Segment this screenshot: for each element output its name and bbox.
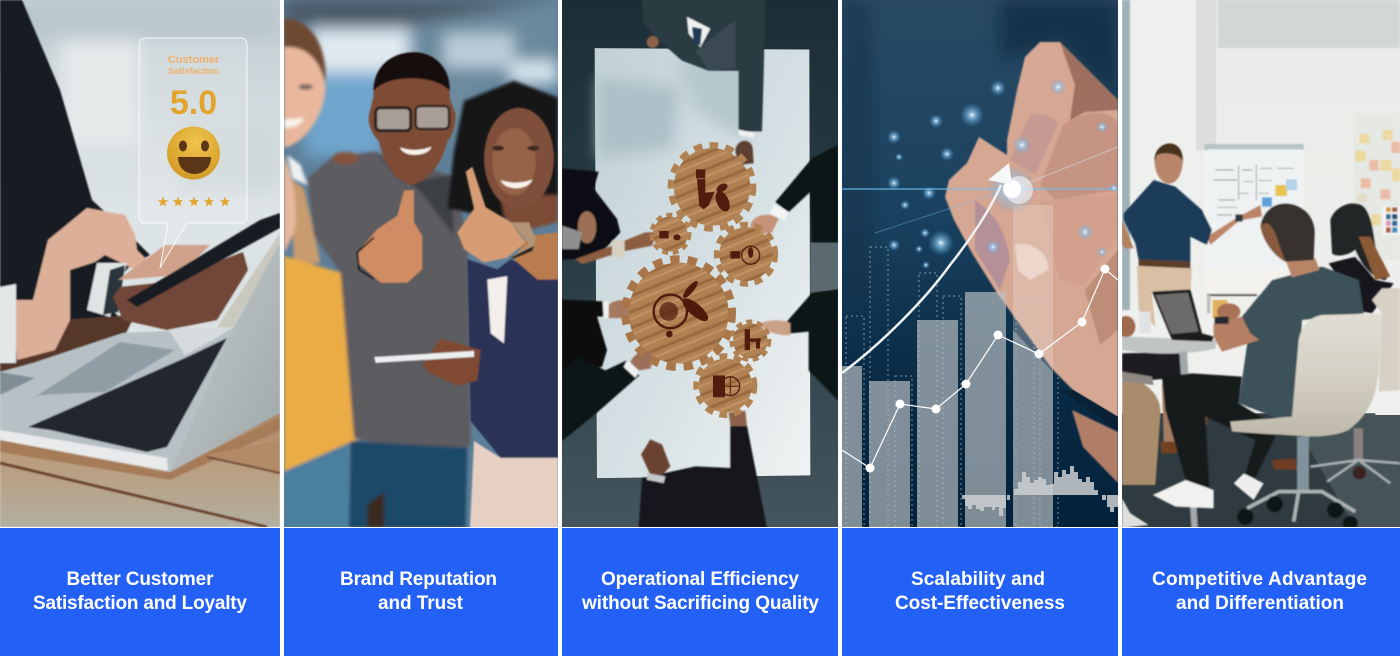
person left middle	[562, 300, 607, 370]
dark seat behind table	[1122, 352, 1185, 380]
man thumb hand	[357, 190, 422, 283]
right woman blouse	[467, 259, 558, 458]
icon: globe with leaves	[654, 279, 711, 337]
person right top	[775, 145, 838, 242]
panel: operational efficiency	[562, 0, 838, 656]
photo: team assembling wooden gears	[562, 0, 838, 528]
photo: presenter at whiteboard in office	[1117, 0, 1400, 531]
panel: scalability	[842, 0, 1119, 656]
caption text: Competitive Advantage	[1152, 569, 1367, 590]
bracelet band	[1060, 390, 1118, 431]
yellow sweater	[284, 256, 361, 471]
right thumb hand	[457, 167, 526, 263]
caption bar	[842, 528, 1118, 656]
laptop screen	[170, 243, 280, 472]
left woman hair strand and collar	[291, 178, 321, 266]
tan trousers left	[1122, 382, 1161, 485]
panel: customer satisfaction	[0, 0, 280, 656]
keyboard	[28, 338, 227, 452]
caption text: Scalability and	[911, 569, 1045, 590]
gears	[625, 145, 775, 415]
caption text: Satisfaction and Loyalty	[33, 593, 247, 614]
right hand	[118, 245, 210, 280]
left woman hair	[284, 17, 328, 82]
mini histogram	[962, 466, 1118, 516]
hand	[945, 42, 1118, 483]
person top	[642, 0, 765, 131]
shirt cuffs	[0, 284, 16, 363]
man smile	[400, 147, 431, 155]
left woman face	[284, 47, 326, 148]
man glasses	[376, 108, 411, 131]
gear: largest	[625, 259, 732, 367]
photo: person using phone and laptop	[0, 0, 280, 527]
gear: right	[717, 225, 775, 284]
right woman neck	[501, 195, 558, 232]
caption text: Operational Efficiency	[601, 569, 799, 590]
presenter lower legs and shoes	[1162, 383, 1180, 443]
bars	[842, 205, 1053, 527]
seated man legs	[1162, 373, 1275, 490]
phone	[127, 213, 280, 307]
photo: group giving thumbs up	[284, 0, 558, 528]
gear: small left	[651, 215, 689, 253]
caption text: Brand Reputation	[340, 569, 497, 590]
man head	[369, 52, 456, 185]
right pants	[470, 441, 558, 528]
icon: pillars	[745, 329, 761, 350]
icon: smiling face	[167, 126, 220, 180]
person left top	[562, 168, 620, 259]
person left lower	[562, 357, 639, 441]
rating callout	[139, 38, 247, 268]
table behind laptop	[0, 315, 135, 372]
gear: small lower right	[731, 322, 769, 360]
icon: small document and leaf	[659, 231, 681, 240]
left jeans	[284, 444, 351, 528]
icon: light bulb	[730, 246, 760, 264]
callout subheading: Satisfaction	[168, 66, 219, 76]
photo: hand drawing growth chart	[842, 0, 1119, 527]
floor	[1122, 413, 1400, 530]
icon: five stars	[158, 196, 230, 206]
bottom left shoe	[1122, 498, 1149, 528]
caption bar	[284, 528, 558, 656]
arrowhead	[988, 163, 1012, 185]
caption bar	[562, 528, 838, 656]
caption text: Better Customer	[66, 569, 214, 590]
gear: top	[671, 145, 753, 229]
person bottom	[639, 426, 767, 528]
chair post and base	[1297, 437, 1309, 490]
lower hand	[1072, 410, 1118, 483]
caption bar	[0, 528, 280, 656]
second chair base	[1354, 428, 1363, 460]
caption text: without Sacrificing Quality	[581, 593, 819, 614]
man jeans	[349, 441, 467, 528]
colour chart	[1383, 206, 1400, 235]
sticky-note wall	[1354, 113, 1400, 260]
right woman face	[484, 108, 554, 209]
right woman hair	[447, 81, 558, 219]
line chart with dots	[842, 264, 1118, 472]
dark jacket	[0, 0, 150, 345]
rising curve	[842, 185, 1001, 373]
white shoes	[1153, 480, 1214, 508]
watch	[511, 222, 536, 258]
chair	[1230, 313, 1382, 437]
panel: competitive advantage	[1117, 0, 1400, 656]
icon: hand with plant	[696, 169, 733, 214]
seated man head	[1260, 203, 1315, 262]
caption text: and Trust	[378, 593, 464, 614]
white top	[487, 276, 507, 343]
icon: people and globe	[713, 375, 740, 397]
callout heading: Customer	[168, 54, 220, 66]
rating score: 5.0	[170, 84, 217, 122]
laptop	[1152, 289, 1214, 342]
whiteboard	[1204, 144, 1304, 313]
man torso	[307, 152, 471, 461]
seated man shirt	[1239, 267, 1364, 425]
second chair	[1372, 288, 1400, 392]
person right lower	[785, 290, 838, 401]
caption text: Cost-Effectiveness	[895, 593, 1065, 614]
seated man arm	[1214, 317, 1259, 352]
right arm	[514, 232, 558, 279]
panel: brand reputation	[284, 0, 558, 656]
hand on shoulder	[332, 152, 359, 164]
seated woman	[1329, 257, 1394, 313]
laptop base	[0, 328, 233, 472]
caption bar	[1122, 528, 1400, 656]
tablet hand	[422, 338, 481, 386]
wooden table	[0, 413, 280, 527]
laptop front edge	[0, 430, 168, 471]
gear: bottom	[696, 356, 755, 415]
left finger	[284, 155, 296, 254]
presenter	[1155, 143, 1183, 184]
sparkle lights	[842, 79, 1119, 269]
caption text: and Differentiation	[1176, 593, 1344, 614]
white table	[595, 48, 810, 478]
tablet	[374, 351, 474, 363]
table	[1122, 337, 1217, 354]
dotted bar outlines	[846, 247, 1058, 527]
left hand	[12, 208, 155, 360]
left hand and cup	[1117, 316, 1135, 337]
seated man neck	[1285, 258, 1319, 277]
snack on table	[1213, 300, 1227, 318]
